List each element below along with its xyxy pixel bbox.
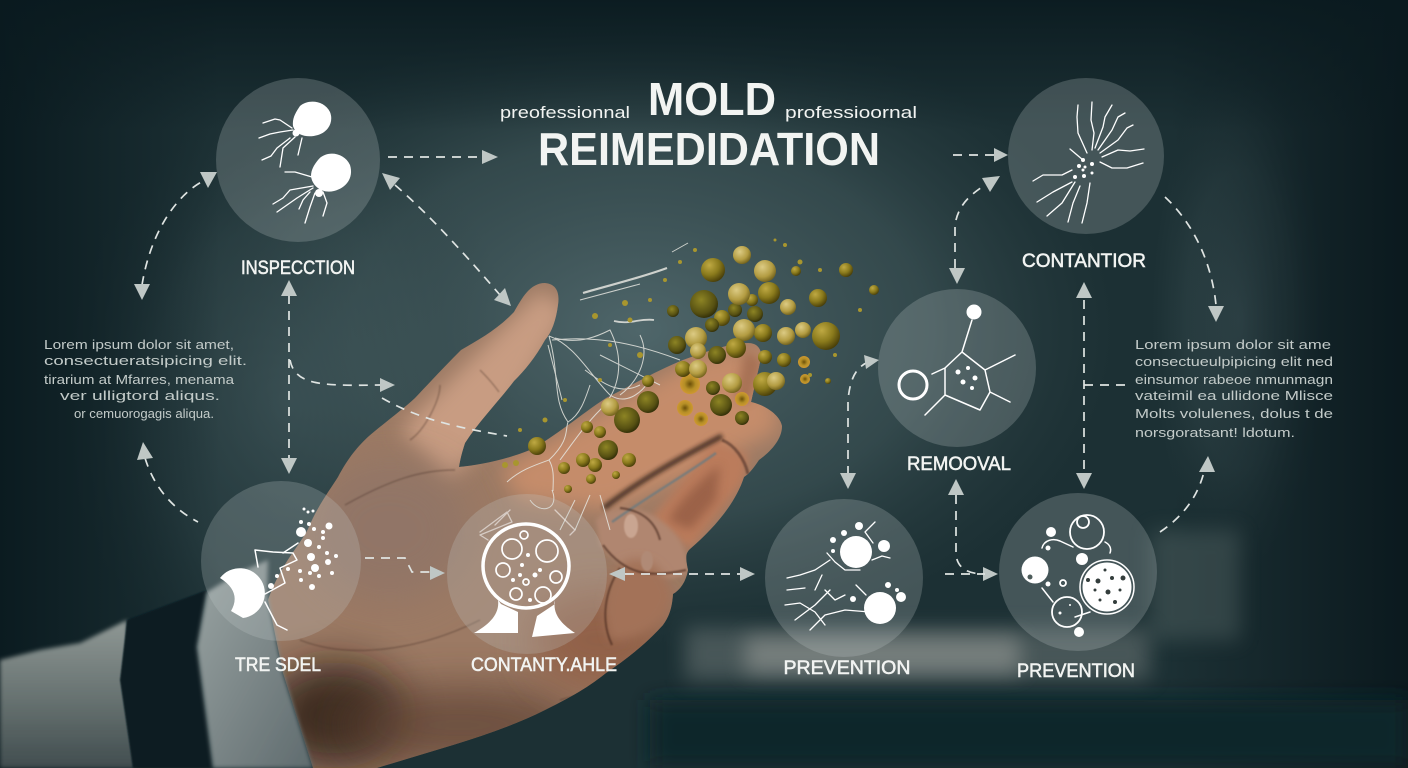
label: INSPECCTION xyxy=(241,258,355,279)
title: MOLD xyxy=(648,73,776,125)
title xyxy=(500,73,917,175)
spores xyxy=(528,246,879,493)
label: REMOOVAL xyxy=(907,454,1011,475)
palm and fingers xyxy=(260,270,800,768)
mold threads xyxy=(507,243,688,530)
icon: spores and threads xyxy=(785,522,906,630)
white shirt xyxy=(197,560,313,768)
disc xyxy=(999,493,1157,651)
icon: cell web xyxy=(899,304,1015,415)
text block: right: Molts volulenes, dolus t de xyxy=(1135,406,1333,421)
label: CONTANTY.AHLE xyxy=(471,655,617,676)
flow arrows xyxy=(134,148,1224,581)
text block: left: ver ulligtord aliqus. xyxy=(60,388,220,403)
label: TRE SDEL xyxy=(235,655,321,676)
icon: dome with spores xyxy=(474,510,575,637)
disc xyxy=(1008,78,1164,234)
node: prevention right xyxy=(999,493,1157,682)
node: prevention left xyxy=(765,499,923,679)
text block: left: tirarium at Mfarres, menama xyxy=(44,372,235,387)
text block: right: vateimil ea ullidone Mlisce xyxy=(1135,388,1333,403)
disc xyxy=(216,78,380,242)
text block: right: norsgoratsant! ldotum. xyxy=(1135,425,1295,440)
text block: right: einsumor rabeoe nmunmagn xyxy=(1135,372,1333,387)
disc xyxy=(447,494,607,654)
particle cloud xyxy=(502,238,879,530)
text block: left: or cemuorogagis aliqua. xyxy=(74,406,214,421)
text block: right: consectueulpipicing elit ned xyxy=(1135,354,1333,369)
icon: spray xyxy=(220,508,338,630)
disc xyxy=(878,289,1036,447)
text block: right xyxy=(1135,337,1333,440)
disc xyxy=(765,499,923,657)
text block: left xyxy=(44,337,247,421)
node: containment xyxy=(1008,78,1164,272)
icon: branching mold xyxy=(1033,102,1144,223)
hand photo xyxy=(0,270,800,768)
node: removal xyxy=(878,289,1036,475)
icon: petri dish and cells xyxy=(1022,515,1134,637)
dark sleeve band xyxy=(120,590,213,768)
shirt cuff left xyxy=(0,620,135,768)
title: preofessionnal xyxy=(500,104,630,122)
text block: right: Lorem ipsum dolor sit ame xyxy=(1135,337,1331,352)
text block: left: Lorem ipsum dolor sit amet, xyxy=(44,337,234,352)
fine dust xyxy=(502,238,862,468)
label: PREVENTION xyxy=(1017,661,1135,682)
title: REIMEDIDATION xyxy=(538,123,880,175)
label: PREVENTION xyxy=(784,658,910,679)
title: professioornal xyxy=(785,104,917,122)
disc xyxy=(201,481,361,641)
icon: mold clusters xyxy=(259,102,351,223)
node: containable xyxy=(447,494,617,676)
node: inspection xyxy=(216,78,380,279)
text block: left: consectueratsipicing elit. xyxy=(44,353,247,368)
node: treat xyxy=(201,481,361,676)
label: CONTANTIOR xyxy=(1022,251,1146,272)
